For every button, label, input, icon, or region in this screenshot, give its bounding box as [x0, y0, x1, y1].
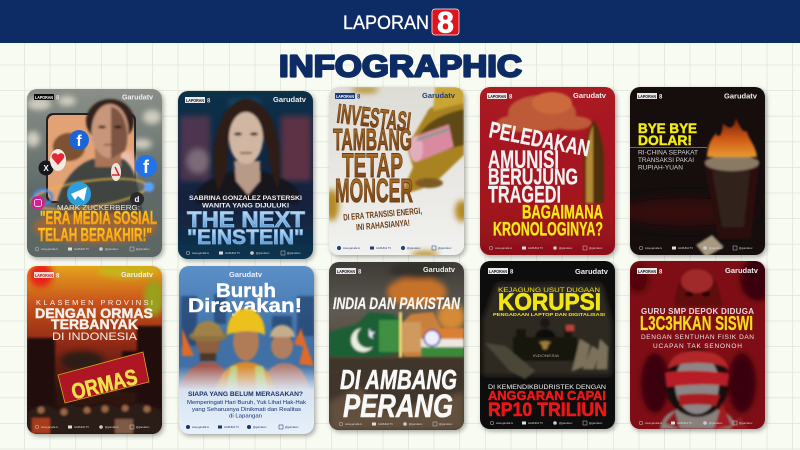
- logos: 8: [357, 94, 361, 100]
- subheading: [187, 391, 307, 420]
- footer links: [639, 421, 753, 425]
- ground: [329, 358, 464, 430]
- footer links: [339, 422, 453, 426]
- card 4: Peledakan Amunisi: [480, 87, 615, 255]
- dark corners: [626, 257, 776, 413]
- logo: Garudatv: [229, 272, 262, 279]
- footer links: GARUDA TV: [225, 251, 240, 255]
- logos: 8: [510, 270, 514, 276]
- header logo: 8: [437, 6, 454, 40]
- logos: Garudatv: [724, 92, 758, 100]
- footer links: @garuda.tv: [285, 425, 299, 429]
- footer links: @garuda.tv: [287, 251, 301, 255]
- footer links: @garuda.tv: [559, 421, 573, 425]
- footer links: @garuda.tv: [439, 422, 453, 426]
- bottom text: [488, 384, 607, 421]
- footer links: @garuda.tv: [136, 425, 150, 429]
- footer links: GARUDA TV: [528, 246, 543, 250]
- footer links: [639, 246, 753, 250]
- headline: KORUPSI: [498, 289, 601, 316]
- footer links: GARUDA TV: [678, 246, 693, 250]
- "INDONESIA" desk label: INDONESIA: [533, 353, 559, 358]
- social media icons: [31, 130, 157, 210]
- footer links: @garuda.tv: [256, 251, 270, 255]
- logos: 8: [659, 270, 663, 276]
- social media icons: f: [143, 157, 150, 177]
- headline: TERBANYAK: [51, 316, 138, 332]
- divider line: [630, 147, 707, 148]
- logos: 8: [207, 98, 211, 104]
- burning bin: [703, 117, 760, 239]
- explosion cloud: [497, 92, 592, 132]
- footer links: @garuda.tv: [559, 246, 573, 250]
- footer links: GARUDA TV: [378, 422, 393, 426]
- portrait: [55, 99, 143, 214]
- footer links: @garuda.tv: [589, 421, 603, 425]
- logos: [637, 93, 757, 99]
- quote text: TELAH BERAKHIR!": [38, 225, 152, 245]
- question text: KRONOLOGINYA?: [493, 220, 603, 240]
- footer links: www.garuda.tv: [192, 251, 210, 255]
- headline: THE NEXT: [187, 207, 306, 232]
- footer links: www.garuda.tv: [41, 425, 59, 429]
- headline bottom: DI AMBANG: [340, 364, 457, 395]
- card 1: Mark Zuckerberg: [26, 89, 162, 257]
- fist: Pakistan: [329, 312, 401, 357]
- logos: Garudatv: [422, 91, 456, 100]
- footer links: www.garuda.tv: [645, 246, 663, 250]
- text glow: [33, 210, 157, 244]
- logos: LAPORAN: [337, 269, 355, 274]
- fist: India: [401, 312, 464, 357]
- clash light: [399, 312, 402, 358]
- headline: UCAPAN TAK SENONOH: [653, 343, 742, 350]
- left worker: [179, 321, 235, 396]
- logos: Garudatv: [575, 267, 609, 276]
- bottom text: ANGGARAN CAPAI: [488, 388, 606, 403]
- header logo: LAPORAN: [343, 13, 429, 34]
- headline: INVESTASI: [335, 99, 412, 137]
- headline: MONCER: [335, 172, 413, 209]
- subheading: SIAPA YANG BELUM MERASAKAN?: [188, 391, 303, 398]
- footer links: @garuda.tv: [438, 246, 452, 250]
- logos: 8: [659, 94, 663, 100]
- portrait: [196, 99, 299, 203]
- subheading: DI ERA TRANSISI ENERGI,: [343, 206, 422, 222]
- background blotches: [180, 99, 311, 181]
- logos: [185, 96, 306, 103]
- logos: Garudatv: [121, 270, 154, 279]
- excavator bucket: [401, 87, 464, 195]
- footer links: www.garuda.tv: [496, 421, 514, 425]
- footer links: @garuda.tv: [739, 421, 753, 425]
- logos: Garudatv: [725, 266, 759, 275]
- logos: Garudatv: [122, 92, 154, 102]
- header bar: [0, 0, 800, 43]
- headline bottom: PERANG: [343, 388, 453, 424]
- logos: [335, 92, 455, 99]
- headline: [35, 298, 153, 343]
- logos: [34, 270, 154, 280]
- banner: ORMAS: [69, 364, 140, 405]
- subheading: [638, 150, 698, 170]
- footer links: www.garuda.tv: [41, 247, 59, 251]
- footer links: [186, 425, 299, 429]
- bottom text: RP10 TRILIUN: [488, 400, 607, 421]
- city background: [181, 294, 314, 346]
- footer links: GARUDA TV: [677, 421, 692, 425]
- logos: 8: [358, 270, 362, 276]
- crowd: [27, 404, 162, 434]
- room scene: [482, 283, 612, 379]
- headline: AMUNISI: [488, 146, 559, 174]
- subheading: Memperingati Hari Buruh, Yuk Lihat Hak-Hak: [187, 400, 307, 406]
- card 2: Sabrina Gonzalez Pasterski: [178, 91, 313, 259]
- headline: KEJAGUNG USUT DUGAAN: [498, 287, 600, 294]
- card 9: Korupsi: [480, 261, 615, 429]
- logos: LAPORAN: [35, 95, 53, 100]
- explosion: [387, 261, 465, 331]
- logos: LAPORAN: [336, 94, 354, 99]
- footer links: @garuda.tv: [709, 246, 723, 250]
- logos: 8: [509, 94, 513, 100]
- headline: KLASEMEN PROVINSI: [36, 298, 153, 307]
- headline: TETAP: [342, 147, 403, 185]
- footer links: [490, 421, 603, 425]
- centre worker: [215, 309, 275, 396]
- orange flags: [182, 328, 314, 366]
- footer links: GARUDA TV: [74, 425, 89, 429]
- social media icons: d: [135, 195, 140, 204]
- logos: 8: [56, 274, 60, 280]
- logos: LAPORAN: [489, 269, 507, 274]
- footer links: [186, 251, 301, 255]
- map highlight: [29, 263, 164, 316]
- logos: [488, 267, 609, 276]
- footer links: GARUDA TV: [74, 247, 89, 251]
- footer links: [489, 246, 603, 250]
- logos: [34, 94, 153, 100]
- headline: "EINSTEIN": [187, 226, 304, 249]
- social media icons: f: [76, 133, 82, 150]
- footer links: GARUDA TV: [528, 421, 543, 425]
- logos: LAPORAN: [186, 98, 204, 103]
- question text: BAGAIMANA: [522, 202, 603, 224]
- logos: [487, 92, 606, 99]
- card 10: Guru SMP Depok: [626, 257, 776, 429]
- headline: [333, 99, 413, 209]
- social media icons: X: [43, 164, 49, 173]
- white fade: [179, 366, 314, 434]
- red glow: [615, 198, 755, 226]
- headline: WANITA YANG DIJULUKI: [202, 202, 289, 210]
- footer links: www.garuda.tv: [345, 422, 363, 426]
- footer links: www.garuda.tv: [495, 246, 513, 250]
- headline: Buruh: [216, 281, 276, 302]
- logos: [637, 266, 759, 276]
- logos: LAPORAN: [638, 94, 656, 99]
- card 3: Investasi Tambang: [325, 87, 469, 257]
- headline: DOLAR!: [638, 132, 692, 148]
- headline: PELEDAKAN: [487, 116, 592, 161]
- phone: [46, 113, 136, 203]
- logos: LAPORAN: [638, 269, 656, 274]
- headline: Dirayakan!: [188, 296, 302, 317]
- headline: BERUJUNG: [488, 164, 578, 190]
- footer links: GARUDA.TV: [376, 246, 391, 250]
- quote text: MARK ZUCKERBERG:: [57, 203, 140, 212]
- footer links: @garuda.tv: [709, 421, 723, 425]
- title: INFOGRAPHIC: [279, 48, 522, 84]
- subheading: di Lapangan: [229, 414, 262, 420]
- footer links: @garuda.tv: [589, 246, 603, 250]
- headline: [640, 307, 754, 350]
- footer links: GARUDA TV: [224, 425, 239, 429]
- headline: [488, 122, 590, 203]
- money roll: [409, 124, 454, 162]
- headline: TRAGEDI: [488, 182, 561, 208]
- gold smudges: [325, 87, 469, 257]
- city silhouettes: [27, 326, 162, 408]
- subheading: [343, 208, 422, 230]
- card 5: Bye Bye Dolar: [615, 87, 765, 257]
- logos: 8: [56, 96, 60, 102]
- footer links: www.garuda.tv: [343, 246, 361, 250]
- smoke: [60, 351, 104, 371]
- footer links: [337, 246, 452, 250]
- footer links: [35, 425, 150, 429]
- headline bottom: [340, 364, 457, 424]
- headline: TAMBANG: [333, 122, 412, 157]
- footer links: @garuda.tv: [409, 422, 423, 426]
- right worker: [259, 325, 311, 396]
- subheading: RUPIAH-YUAN: [638, 164, 683, 172]
- headline top: INDIA DAN PAKISTAN: [333, 294, 461, 313]
- subheading: INI RAHASIANYA!: [356, 218, 410, 232]
- footer links: @garuda.tv: [136, 247, 150, 251]
- card 7: Buruh Dirayakan: [179, 266, 314, 434]
- light swirl: [29, 176, 156, 212]
- bullet: [584, 120, 604, 203]
- headline: DENGAN ORMAS: [35, 305, 153, 321]
- card 6: Klasemen Ormas: [27, 263, 164, 434]
- subheading: TRANSAKSI PAKAI: [638, 157, 694, 164]
- question text: [494, 204, 603, 236]
- headline: SABRINA GONZALEZ PASTERSKI: [189, 195, 302, 202]
- bottom text: DI KEMENDIKBUDRISTEK DENGAN: [488, 384, 606, 391]
- subheading: RI-CHINA SEPAKAT: [638, 150, 698, 156]
- logos: Garudatv: [423, 265, 456, 274]
- footer links: www.garuda.tv: [645, 421, 663, 425]
- headline: BYE BYE: [638, 120, 697, 136]
- footer links: @garuda.tv: [739, 246, 753, 250]
- logos: [336, 265, 456, 276]
- quote text: [38, 205, 157, 242]
- footer links: @garuda.tv: [105, 425, 119, 429]
- fallen banknote: [696, 235, 724, 257]
- quote text: "ERA MEDIA SOSIAL: [40, 208, 157, 228]
- logos: Garudatv: [273, 95, 307, 104]
- footer links: www.garuda.tv: [192, 425, 210, 429]
- subheading: yang Seharusnya Dinikmati dan Realitas: [192, 407, 302, 413]
- blurred background lights: [26, 96, 161, 149]
- footer links: [35, 247, 150, 251]
- headline: GURU SMP DEPOK DIDUGA: [641, 307, 754, 316]
- footer links: @garuda.tv: [105, 247, 119, 251]
- card 8: India dan Pakistan: [329, 261, 465, 430]
- girl portrait: [660, 349, 748, 429]
- header logo: [343, 6, 459, 40]
- headline: DENGAN SENTUHAN FISIK DAN: [641, 334, 754, 341]
- headline: [188, 281, 302, 317]
- headline: [187, 195, 306, 249]
- footer links: @garuda.tv: [407, 246, 421, 250]
- footer links: @garuda.tv: [253, 425, 267, 429]
- logos: LAPORAN: [35, 273, 53, 278]
- logos: LAPORAN: [488, 94, 506, 99]
- demon face: [674, 268, 722, 306]
- headline: PENGADAAN LAPTOP DAN DIGITALISASI: [493, 312, 606, 318]
- headline: [638, 123, 697, 146]
- headline: DI INDONESIA: [52, 331, 138, 343]
- logos: Garudatv: [573, 91, 607, 100]
